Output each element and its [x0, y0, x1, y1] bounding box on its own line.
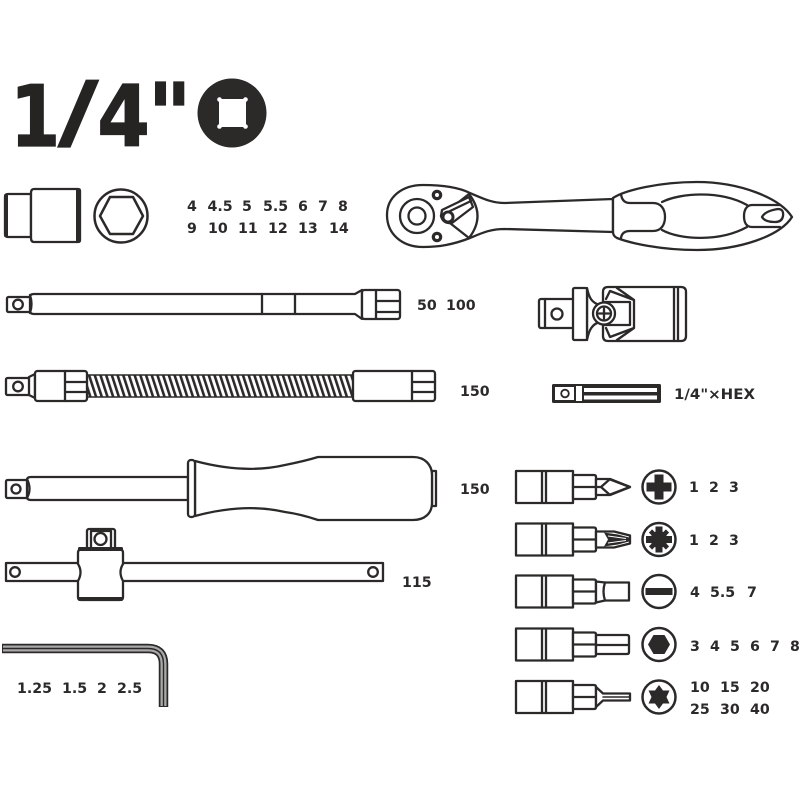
label: hex sizes: 3 [690, 639, 700, 655]
label: slotted sizes: 5.5 [710, 585, 735, 601]
socket sizes: 10 [208, 221, 228, 237]
label: Torx sizes [690, 680, 770, 718]
label: 115: 115 [402, 575, 432, 591]
title: 1/4 inch [10, 64, 266, 166]
socket sizes: 4.5 [208, 199, 233, 215]
hex key sizes: 1.5 [62, 681, 87, 697]
socket side view [4, 189, 80, 242]
label: hex sizes: 5 [730, 639, 740, 655]
icon: Pozidriv [642, 523, 676, 556]
label: Pozidriv sizes: 2 [709, 533, 719, 549]
screwdriver handle [6, 457, 436, 520]
universal joint [539, 287, 686, 341]
label: slotted sizes: 7 [747, 585, 757, 601]
label: Torx sizes: 30 [720, 702, 740, 718]
sliding T-bar [6, 529, 383, 601]
flexible extension [6, 371, 435, 401]
label: 1/4 x HEX: 1/4"×HEX [674, 387, 755, 403]
hex key sizes: 1.25 [17, 681, 52, 697]
label: hex sizes: 8 [790, 639, 800, 655]
icon: hex [642, 628, 676, 661]
label: Pozidriv sizes: 3 [729, 533, 739, 549]
socket sizes: 8 [338, 199, 348, 215]
bit: Pozidriv [516, 524, 630, 556]
socket sizes [187, 199, 349, 237]
ratchet [387, 182, 792, 250]
icon: Phillips [642, 470, 676, 504]
icon: square drive [198, 78, 266, 148]
socket end view [94, 190, 148, 242]
label: hex sizes: 7 [770, 639, 780, 655]
label: hex sizes: 4 [710, 639, 720, 655]
label: Phillips sizes: 1 [689, 480, 699, 496]
socket sizes: 9 [187, 221, 197, 237]
title: 1/4 inch: / [58, 64, 99, 159]
bit: hex [516, 628, 629, 660]
label: Torx sizes: 20 [750, 680, 770, 696]
socket sizes: 4 [187, 199, 197, 215]
icon: slotted [642, 575, 676, 608]
bit: slotted [516, 576, 629, 608]
socket sizes: 5.5 [263, 199, 288, 215]
extension bar 50 100 [7, 290, 400, 319]
label: 50 100: 100 [446, 298, 476, 314]
socket sizes: 5 [242, 199, 252, 215]
socket sizes: 14 [329, 221, 349, 237]
label: Torx sizes: 15 [720, 680, 740, 696]
bit: Phillips [516, 471, 630, 503]
label: Phillips sizes: 2 [709, 480, 719, 496]
icon: Torx [642, 680, 676, 714]
socket sizes: 7 [318, 199, 328, 215]
label: Torx sizes: 10 [690, 680, 710, 696]
hex key [2, 648, 164, 707]
hex key sizes: 2 [97, 681, 107, 697]
hex key sizes: 2.5 [117, 681, 142, 697]
label: 50 100: 50 [417, 298, 437, 314]
socket sizes: 13 [298, 221, 318, 237]
socket sizes: 6 [298, 199, 308, 215]
bit: Torx [516, 681, 630, 713]
label: Torx sizes: 40 [750, 702, 770, 718]
title: 1/4 inch: 4 [97, 67, 150, 166]
title: 1/4 inch: 1 [10, 67, 60, 166]
socket sizes: 12 [268, 221, 288, 237]
title: 1/4 inch: " [148, 66, 192, 165]
label: 150 driver: 150 [460, 482, 490, 498]
hex adapter [552, 384, 661, 403]
label: 150 flexible: 150 [460, 384, 490, 400]
socket sizes: 11 [238, 221, 258, 237]
label: Torx sizes: 25 [690, 702, 710, 718]
label: Phillips sizes: 3 [729, 480, 739, 496]
label: Pozidriv sizes: 1 [689, 533, 699, 549]
label: slotted sizes: 4 [690, 585, 700, 601]
label: hex sizes: 6 [750, 639, 760, 655]
